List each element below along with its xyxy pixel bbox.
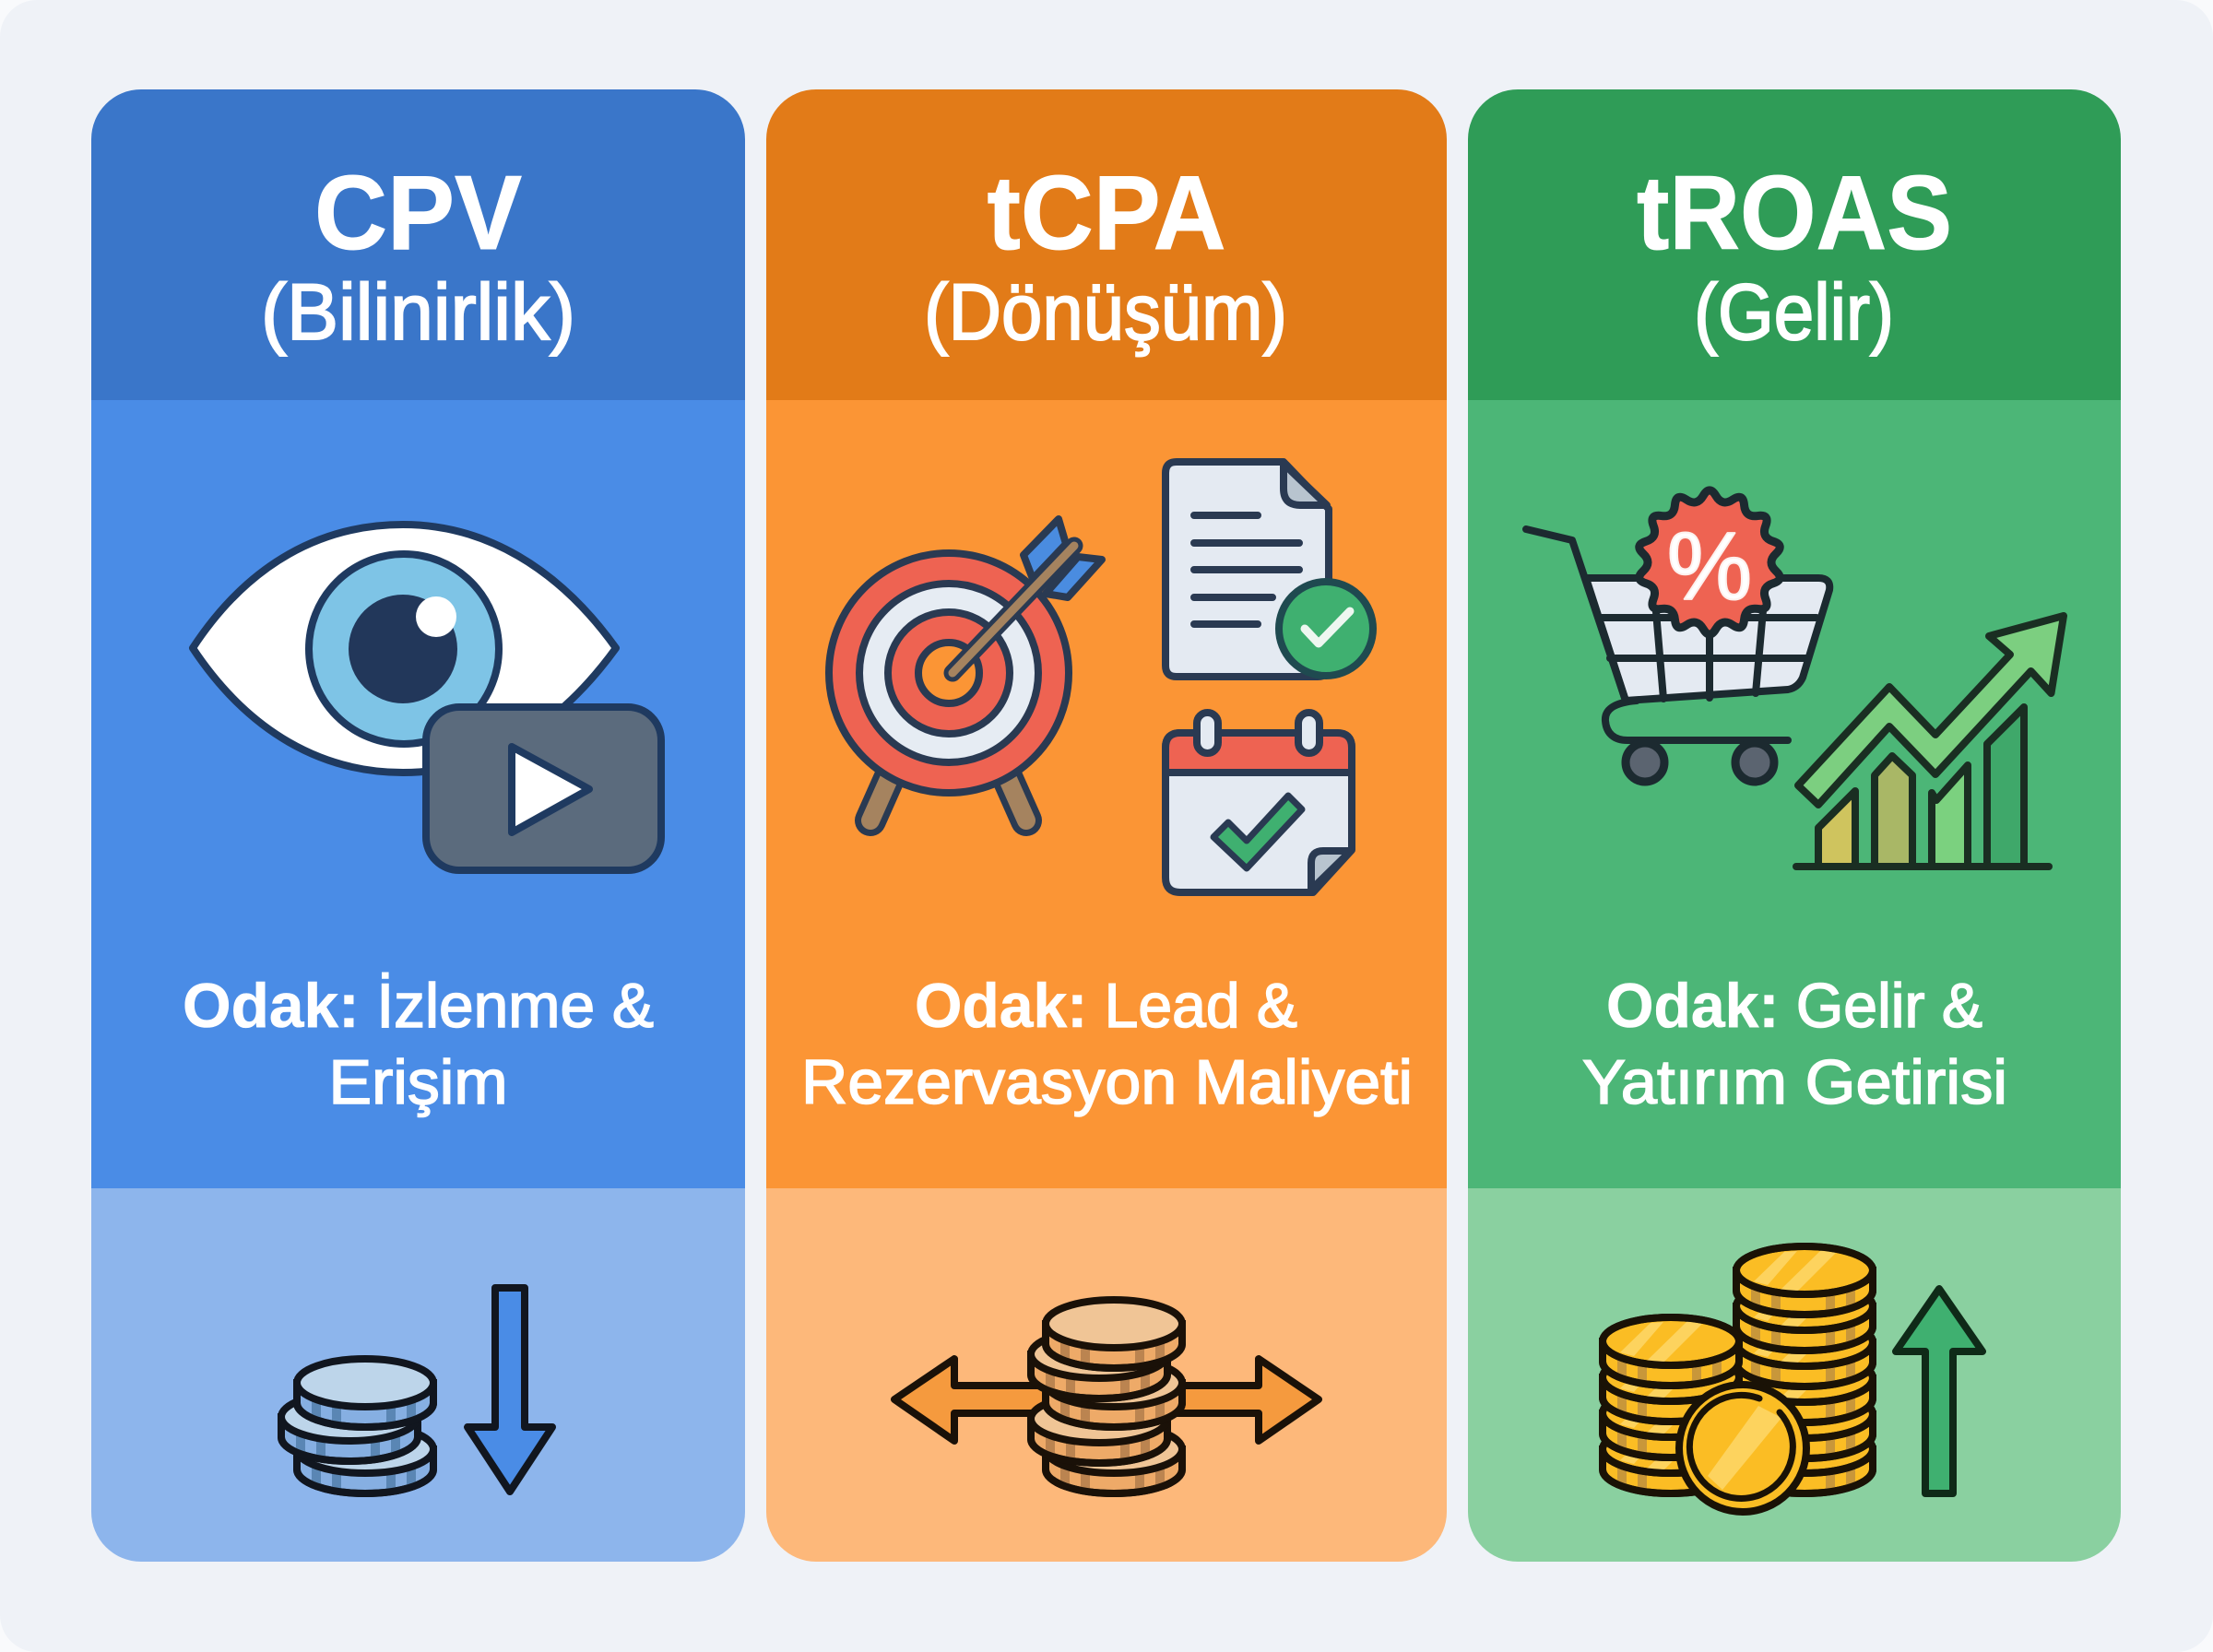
focus text: tROAS: Yatırım Getirisi [1582, 1047, 2007, 1117]
icon: document with check badge [1166, 462, 1373, 677]
panel bands: tROAS [1468, 89, 2121, 1562]
focus text: tROAS: Odak: Gelir & [1606, 971, 1982, 1041]
subheading: Gelir: (Gelir) [1694, 268, 1894, 357]
panel bands: CPV [91, 89, 745, 1562]
icon: calendar with check [1166, 713, 1352, 892]
focus text: tCPA [801, 971, 1413, 1117]
icon: small coin stack [281, 1359, 433, 1493]
focus text: CPV: Erişim [328, 1047, 507, 1117]
focus text: CPV: Odak: İzlenme & [183, 971, 654, 1041]
panel: tCPA [766, 89, 1447, 1562]
panel: CPV [91, 89, 745, 1562]
icon: shopping cart with discount badge [1526, 490, 1829, 782]
panel bands: tCPA [766, 89, 1447, 1562]
focus text: tCPA: Odak: Lead & [915, 971, 1297, 1041]
icon: target with arrow [829, 519, 1102, 820]
arrow: up [1896, 1289, 1982, 1493]
icon: eye with video play button [193, 525, 661, 870]
arrow: down [467, 1288, 552, 1492]
heading: tROAS: tROAS [1637, 155, 1952, 272]
focus text: tROAS [1582, 971, 2007, 1117]
focus text: tCPA: Rezervasyon Maliyeti [801, 1047, 1413, 1117]
heading: CPV: CPV [314, 155, 522, 272]
focus text: CPV [183, 971, 654, 1117]
heading: tCPA: tCPA [987, 155, 1226, 272]
subheading: Dönüşüm: (Dönüşüm) [924, 268, 1287, 357]
panel: tROAS [1468, 89, 2121, 1562]
arrow: left [894, 1359, 1051, 1441]
chart: rising bars with arrow [1796, 616, 2064, 867]
icon: shopping cart with discount badge: % [1667, 513, 1752, 620]
subheading: Bilinirlik: (Bilinirlik) [261, 268, 575, 357]
arrow: right [1162, 1359, 1319, 1441]
icon: coin stack [1031, 1300, 1182, 1493]
icon: gold coin stacks [1603, 1246, 1873, 1512]
